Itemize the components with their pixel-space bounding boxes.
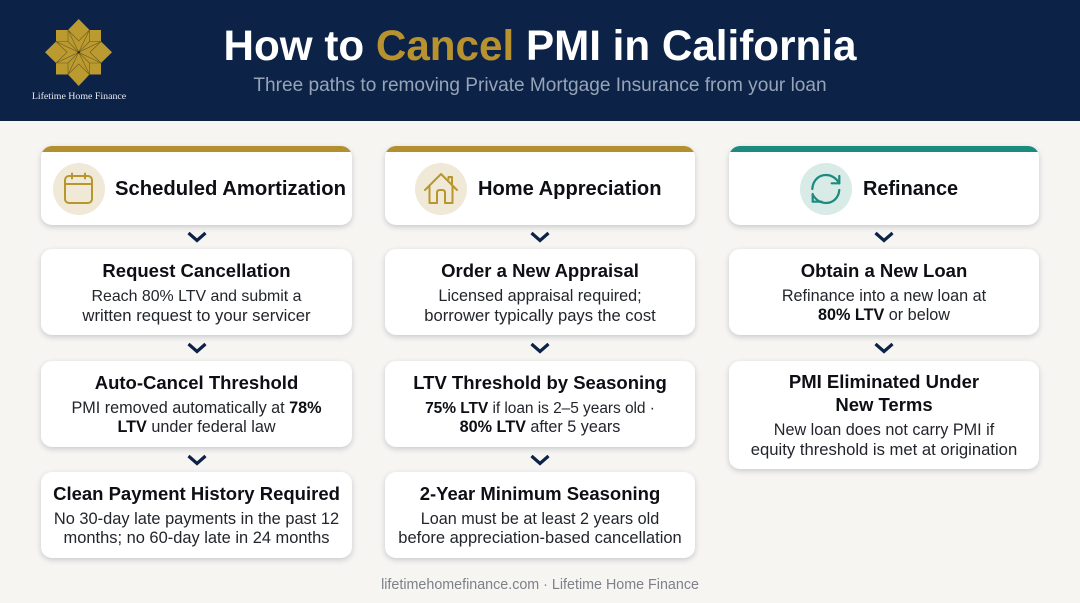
step title: Clean Payment History Required <box>53 483 340 504</box>
arrow <box>530 342 550 354</box>
step text: Licensed appraisal required; <box>438 287 642 305</box>
step text <box>71 399 322 436</box>
arrow <box>188 342 206 354</box>
step text <box>54 510 339 547</box>
step text: No 30-day late payments in the past 12 <box>54 510 339 528</box>
icon: refresh <box>800 163 852 215</box>
step title: 2-Year Minimum Seasoning <box>420 483 660 504</box>
step title <box>789 371 979 415</box>
arrow <box>530 232 550 243</box>
footer: lifetimehomefinance.com · Lifetime Home Finance <box>381 577 699 593</box>
step text: borrower typically pays the cost <box>424 306 656 325</box>
subtitle: Three paths to removing Private Mortgage Insurance from your loan <box>253 75 827 96</box>
arrow <box>874 342 894 354</box>
step: request cancellation <box>41 249 352 335</box>
step: order appraisal <box>385 249 695 335</box>
accent bar <box>729 146 1039 152</box>
logo mark <box>45 19 112 86</box>
step text: equity threshold is met at origination <box>751 440 1017 459</box>
step text: written request to your servicer <box>82 306 311 325</box>
header banner <box>0 0 1080 121</box>
arrow <box>530 454 550 466</box>
step text: 80% LTV or below <box>818 306 950 324</box>
step text <box>425 400 655 436</box>
step text: Refinance into a new loan at <box>782 287 986 305</box>
title: How to Cancel PMI in California <box>224 22 856 69</box>
panel: refinance header <box>729 146 1039 225</box>
step: pmi eliminated <box>729 361 1039 469</box>
step text: 75% LTV if loan is 2–5 years old · <box>425 400 655 417</box>
step title: LTV Threshold by Seasoning <box>413 372 667 393</box>
step title: Request Cancellation <box>102 260 291 281</box>
step text: 80% LTV after 5 years <box>460 418 620 436</box>
accent bar <box>41 146 352 152</box>
step: minimum seasoning <box>385 472 695 558</box>
step text <box>424 287 656 325</box>
step text: PMI removed automatically at 78% <box>71 399 322 417</box>
accent bar <box>385 146 695 152</box>
step text: Loan must be at least 2 years old <box>421 510 659 528</box>
icon: calendar <box>53 163 105 215</box>
arrow <box>874 232 894 243</box>
step text: before appreciation-based cancellation <box>398 529 682 547</box>
heading: Refinance <box>863 178 958 200</box>
step: ltv threshold <box>385 361 695 447</box>
arrow <box>188 232 206 243</box>
step: obtain new loan <box>729 249 1039 335</box>
step text: Reach 80% LTV and submit a <box>92 288 301 305</box>
step title: Auto-Cancel Threshold <box>95 372 298 393</box>
heading: Home Appreciation <box>478 178 661 200</box>
step: clean payment history <box>41 472 352 558</box>
step text: LTV under federal law <box>117 418 276 436</box>
step title: PMI Eliminated Under <box>789 371 979 392</box>
panel: home appreciation header <box>385 146 695 225</box>
step text <box>751 421 1017 459</box>
step text <box>398 510 682 547</box>
panel: scheduled amortization header <box>41 146 352 225</box>
icon: house <box>415 163 467 215</box>
step: auto-cancel threshold <box>41 361 352 447</box>
step title: New Terms <box>835 394 933 415</box>
step text: months; no 60-day late in 24 months <box>64 529 329 547</box>
step text <box>82 288 311 325</box>
step title: Obtain a New Loan <box>801 260 967 281</box>
heading: Scheduled Amortization <box>115 178 346 200</box>
arrow <box>188 454 206 466</box>
logo name: Lifetime Home Finance <box>32 91 126 102</box>
step title: Order a New Appraisal <box>441 260 639 281</box>
step text <box>782 287 986 324</box>
step text: New loan does not carry PMI if <box>774 421 994 439</box>
